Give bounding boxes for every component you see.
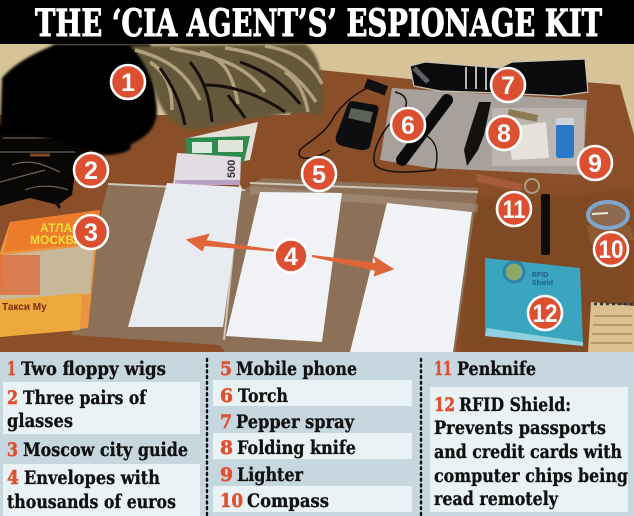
wig: black (0, 44, 157, 155)
item 3: 3 (7, 439, 18, 461)
banknotes (173, 122, 258, 185)
photo: espionage kit on a table (0, 44, 634, 352)
item 10: 10 (220, 490, 243, 512)
item 12: read remotely (434, 488, 559, 510)
item 11: Penknife (457, 358, 536, 380)
envelope 1 (128, 183, 242, 327)
item 12: Prevents passports (434, 417, 606, 439)
marker 5: 5 (312, 161, 326, 189)
icon: sunglasses (0, 125, 100, 208)
icon: RFID shield (485, 258, 583, 346)
envelope 3 (350, 203, 472, 352)
marker 12: 12 (532, 300, 558, 328)
item 1: Two floppy wigs (21, 358, 166, 380)
item 9: Lighter (237, 464, 304, 486)
marker 1 (111, 65, 145, 99)
icon: RFID shield: RFID (532, 272, 548, 279)
item 2: glasses (7, 410, 73, 432)
item 9: 9 (220, 464, 233, 486)
torch and knife bag (380, 88, 587, 175)
item 12 (434, 394, 628, 510)
item 7: 7 (220, 411, 232, 433)
item 7: Pepper spray (236, 411, 355, 433)
icon: torch (402, 100, 447, 160)
marker 8: 8 (497, 120, 511, 148)
marker 8 (487, 116, 521, 150)
item 4: Envelopes with (24, 467, 160, 489)
icon: Moscow city guide: Такси Му (2, 302, 47, 313)
item 11: 11 (434, 358, 452, 380)
marker 4: 4 (284, 243, 298, 271)
item 2 (7, 387, 147, 432)
marker 4 (274, 240, 308, 272)
marker 2: 2 (84, 157, 98, 185)
item 4 (7, 467, 176, 513)
item 10 (220, 490, 329, 512)
item 1: 1 (7, 358, 16, 380)
left column: items 1 to 4 (3, 358, 200, 516)
wall (0, 44, 634, 135)
icon: compass (587, 202, 634, 243)
item 8: Folding knife (237, 437, 356, 459)
item 12: RFID Shield: (459, 394, 571, 416)
marker 7: 7 (501, 72, 515, 100)
item 10: Compass (247, 490, 329, 512)
marker 3 (74, 215, 108, 249)
envelopes bag (72, 178, 478, 352)
middle column: items 5 to 10 (213, 358, 412, 512)
key panel (0, 352, 634, 516)
item 5: Mobile phone (236, 358, 357, 380)
marker 10: 10 (598, 236, 624, 264)
marker 9: 9 (588, 150, 602, 178)
marker 9 (578, 146, 612, 180)
marker 2 (74, 153, 108, 187)
item 4: thousands of euros (7, 491, 176, 513)
marker 1: 1 (121, 69, 135, 97)
item 5: 5 (220, 358, 232, 380)
icon: penknife (477, 174, 550, 255)
item 11 (434, 358, 536, 380)
item 2: Three pairs of (23, 387, 147, 409)
icon: notebook (588, 302, 634, 352)
item 4: 4 (7, 467, 19, 489)
wig: blond (130, 44, 323, 130)
marker 12 (528, 296, 562, 330)
title bar (0, 0, 634, 45)
item 3: Moscow city guide (23, 439, 188, 461)
marker 11: 11 (502, 196, 526, 224)
item 12: 12 (434, 394, 455, 416)
envelope 2 (226, 192, 342, 342)
icon: card and batteries (507, 109, 549, 160)
marker 6: 6 (401, 112, 415, 140)
item 6: 6 (220, 385, 233, 407)
icon: black pouch and pepper spray (410, 59, 588, 96)
icon: RFID shield: Shield (532, 280, 553, 287)
marker 6 (391, 108, 425, 142)
item 8: 8 (220, 437, 233, 459)
marker 11 (497, 192, 531, 226)
right column: items 11 and 12 (430, 358, 628, 512)
icon: mobile phone (336, 101, 379, 150)
marker 3: 3 (84, 219, 98, 247)
marker 5 (302, 157, 336, 191)
wires (299, 85, 437, 172)
column dividers (207, 359, 421, 516)
table shading (460, 190, 634, 352)
marker 10 (594, 232, 628, 266)
banknotes: 500 (226, 160, 238, 178)
item 6: Torch (238, 385, 288, 407)
item 6 (220, 385, 288, 407)
item 2: 2 (7, 387, 18, 409)
arrow: right envelope (312, 256, 392, 275)
icon: Moscow city guide (0, 210, 100, 337)
icon: lighter (556, 118, 574, 158)
marker 7 (491, 68, 525, 102)
item 9 (220, 464, 304, 486)
icon: folding knife (464, 102, 491, 166)
icon: Moscow city guide: АТЛАС (40, 221, 81, 235)
icon: Moscow city guide: МОСКВА (30, 233, 82, 247)
arrow: left envelope (188, 235, 278, 251)
